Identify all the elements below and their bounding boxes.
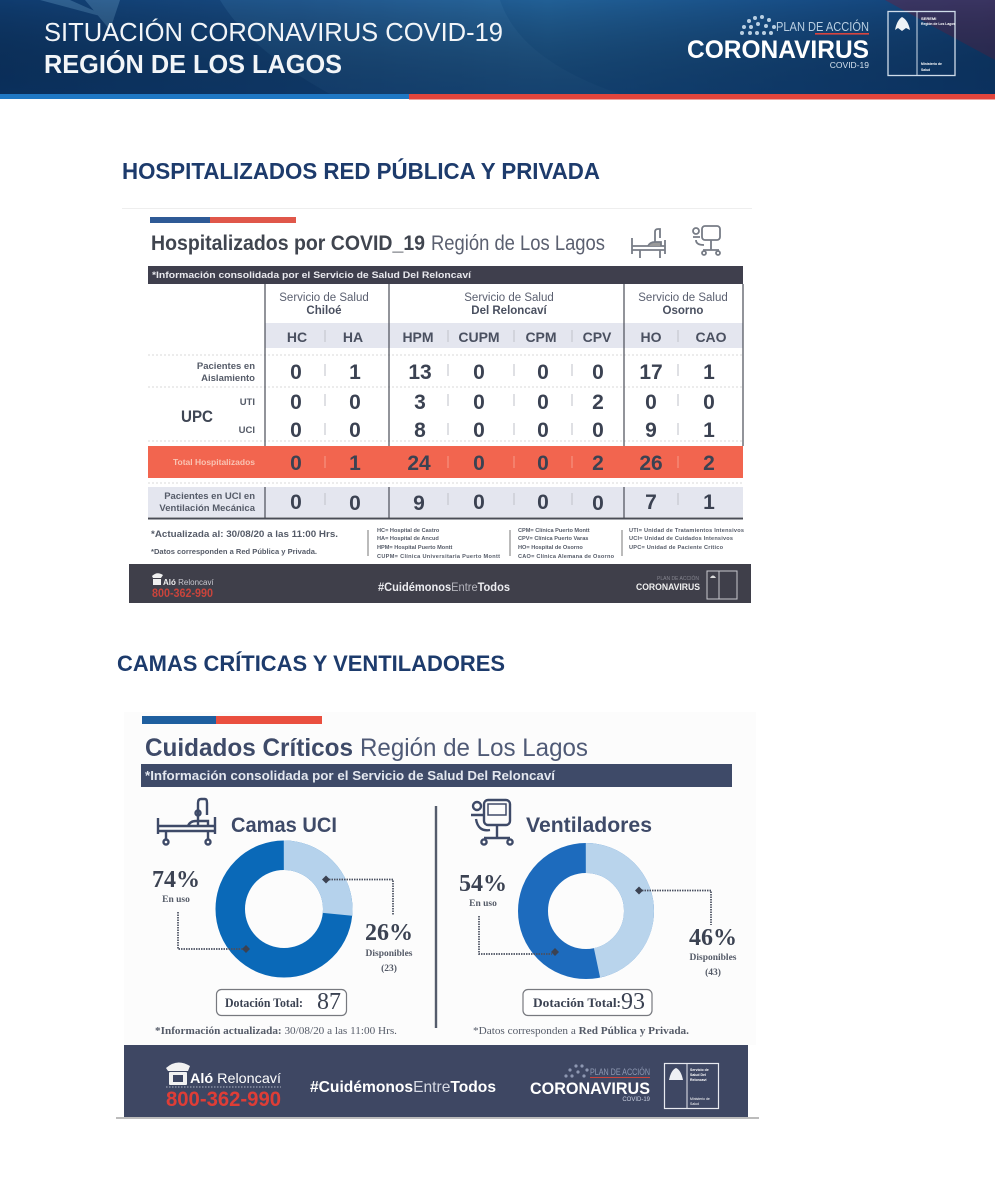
row: pacientes en aislamiento: 17 — [639, 361, 663, 384]
callout: en uso 54% — [459, 871, 559, 956]
row: total hospitalizados: 1 — [349, 452, 361, 475]
row: uci: 0 — [537, 419, 549, 442]
label: ventiladores: Ventiladores — [526, 814, 652, 837]
section: ventiladores — [459, 800, 737, 1037]
dotación total box: Dotación Total: — [533, 996, 621, 1010]
header logo: seremi de salud: SEREMI — [921, 16, 936, 21]
row: total hospitalizados: 26 — [639, 452, 663, 475]
callout: en uso 74% — [152, 867, 250, 953]
row: uci: 9 — [645, 419, 657, 442]
total row highlight — [148, 446, 743, 478]
table column codes: HO — [640, 329, 662, 345]
row: total hospitalizados: 0 — [537, 452, 549, 475]
row labels — [159, 361, 256, 514]
ventilation row highlight — [148, 487, 743, 517]
callout: en uso 54%: 54% — [459, 871, 507, 897]
row labels: UPC — [181, 407, 213, 426]
callout: disponibles 46%: Disponibles — [690, 953, 737, 963]
icon: bed — [158, 799, 215, 844]
row: pacientes en aislamiento — [290, 361, 715, 384]
row: total hospitalizados: 2 — [703, 452, 715, 475]
callout: en uso 74%: En uso — [162, 895, 190, 905]
row labels: Aislamiento — [201, 373, 255, 384]
heading: camas críticas: CAMAS CRÍTICAS Y VENTILADORES — [117, 651, 505, 676]
abbreviation legend: HO= Hospital de Osorno — [518, 545, 583, 551]
icon: hospital bed — [632, 229, 665, 258]
table column group headers: Del Reloncaví — [471, 305, 548, 317]
table column group headers: Osorno — [663, 305, 703, 317]
row: ventilación mecánica — [290, 491, 715, 515]
row: total hospitalizados — [290, 452, 715, 475]
header banner — [0, 0, 995, 100]
row labels: Total Hospitalizados — [173, 457, 255, 467]
row: uti: 0 — [290, 391, 302, 414]
header logo: plan de acción coronavirus — [687, 15, 869, 70]
header logo: seremi de salud — [888, 12, 955, 76]
row: total hospitalizados: 0 — [473, 452, 485, 475]
table column codes — [265, 323, 743, 348]
note: datos corresponden: *Datos corresponden a Red Pública y Privada. — [473, 1026, 689, 1037]
table column codes: CAO — [695, 329, 727, 345]
row: pacientes en aislamiento: 0 — [537, 361, 549, 384]
panel footer: Aló Reloncaví — [163, 578, 214, 587]
panel title — [145, 734, 588, 762]
callout: en uso 54%: En uso — [469, 899, 497, 909]
callout: disponibles 46%: 46% — [689, 925, 737, 951]
row labels: UCI — [239, 425, 255, 436]
callout: disponibles 26%: 26% — [365, 920, 413, 946]
row: total hospitalizados: 2 — [592, 452, 604, 475]
row: ventilación mecánica: 7 — [645, 491, 657, 514]
row: pacientes en aislamiento: 1 — [349, 361, 361, 384]
abbreviation legend: UPC= Unidad de Paciente Crítico — [629, 545, 724, 551]
row: ventilación mecánica: 0 — [290, 491, 302, 514]
header title: REGIÓN DE LOS LAGOS — [44, 49, 342, 79]
header title — [44, 17, 503, 79]
logo: ministerio: Ministerio de — [690, 1097, 710, 1101]
label: camas uci: Camas UCI — [231, 814, 337, 837]
panel footer: PLAN DE ACCIÓN — [657, 575, 699, 582]
callout: disponibles 46% — [635, 886, 737, 978]
logo: plan de acción coronavirus: PLAN DE ACCIÓN — [590, 1067, 650, 1077]
row: uci: 0 — [349, 419, 361, 442]
row: pacientes en aislamiento: 13 — [408, 361, 432, 384]
callout: disponibles 26%: Disponibles — [366, 949, 413, 959]
row: ventilación mecánica: 0 — [592, 492, 604, 515]
panel: hospitalizados table — [122, 208, 752, 603]
row: pacientes en aislamiento: 0 — [473, 361, 485, 384]
row: uti: 0 — [703, 391, 715, 414]
accent stripes — [150, 217, 296, 223]
row: uci: 1 — [703, 419, 715, 442]
table column group headers: Servicio de Salud — [279, 292, 369, 304]
table column codes: CPV — [583, 329, 612, 345]
abbreviation legend: HC= Hospital de Castro — [377, 528, 440, 534]
row: uti: 0 — [645, 391, 657, 414]
row labels: Ventilación Mecánica — [159, 503, 256, 514]
table column codes: HPM — [402, 329, 434, 345]
table column codes: HA — [343, 329, 363, 345]
info bar: *Información consolidada por el Servicio de Salud Del Reloncaví — [152, 270, 471, 281]
info bar: *Información consolidada por el Servicio de Salud Del Reloncaví — [145, 768, 555, 783]
panel footer: CORONAVIRUS — [636, 582, 700, 593]
abbreviation legend: HA= Hospital de Ancud — [377, 536, 439, 542]
callout: disponibles 26% — [322, 876, 413, 974]
abbreviation legend: UTI= Unidad de Tratamientos Intensivos — [629, 528, 744, 534]
abbreviation legend: HPM= Hospital Puerto Montt — [377, 545, 452, 551]
update notes: *Datos corresponden a Red Pública y Privada. — [151, 547, 317, 556]
row: ventilación mecánica: 0 — [473, 491, 485, 514]
header logo: plan de acción coronavirus: PLAN DE ACCIÓN — [776, 19, 869, 34]
update notes: *Actualizada al: 30/08/20 a las 11:00 Hrs. — [151, 529, 338, 540]
accent stripes — [142, 716, 322, 724]
panel footer: #CuidémonosEntreTodos — [378, 580, 510, 594]
callout: en uso 74%: 74% — [152, 867, 200, 893]
logo: ministerio: Salud — [690, 1102, 699, 1106]
info bar — [141, 764, 732, 787]
header title: SITUACIÓN CORONAVIRUS COVID-19 — [44, 17, 503, 47]
panel title — [151, 232, 605, 255]
row: uci: 0 — [290, 419, 302, 442]
update notes — [151, 529, 338, 556]
logo: plan de acción coronavirus: CORONAVIRUS — [530, 1079, 650, 1098]
logo: plan de acción coronavirus: COVID-19 — [622, 1097, 651, 1103]
row: total hospitalizados: 24 — [407, 452, 431, 475]
panel title: Hospitalizados por COVID_19 — [151, 232, 425, 255]
row: ventilación mecánica: 0 — [349, 492, 361, 515]
table column group headers — [279, 292, 728, 317]
row: pacientes en aislamiento: 0 — [592, 361, 604, 384]
table column codes: CPM — [525, 329, 557, 345]
table column codes: HC — [287, 329, 307, 345]
row: uti: 2 — [592, 391, 604, 414]
row: uti: 3 — [414, 391, 426, 414]
dotación total box: 87 — [317, 989, 341, 1015]
dotación total box: Dotación Total: — [225, 996, 303, 1010]
row labels: UTI — [240, 397, 255, 408]
row labels: Pacientes en UCI en — [164, 491, 255, 502]
abbreviation legend: CPV= Clínica Puerto Varas — [518, 536, 588, 542]
row: pacientes en aislamiento: 1 — [703, 361, 715, 384]
dotación total box — [216, 989, 346, 1016]
row: uti: 0 — [473, 391, 485, 414]
row: uti: 0 — [349, 391, 361, 414]
logo: ministerio: Servicio de — [690, 1068, 709, 1072]
donut chart: camas uci — [230, 855, 338, 963]
row labels: Pacientes en — [197, 361, 255, 372]
row: ventilación mecánica: 9 — [413, 492, 425, 515]
table column group headers: Servicio de Salud — [638, 292, 728, 304]
aló reloncaví phone line — [166, 1070, 281, 1111]
table column codes: CUPM — [458, 329, 500, 345]
panel footer — [116, 1045, 759, 1119]
abbreviation legend: UCI= Unidad de Cuidados Intensivos — [629, 536, 733, 542]
table frame lines — [148, 284, 743, 518]
header logo: seremi de salud: Salud — [921, 68, 930, 72]
header logo: plan de acción coronavirus: COVID-19 — [830, 60, 869, 70]
header logo: plan de acción coronavirus: CORONAVIRUS — [687, 36, 869, 64]
logo: plan de acción coronavirus — [530, 1064, 651, 1103]
callout: disponibles 26%: (23) — [381, 963, 397, 974]
donut chart: ventiladores — [533, 858, 639, 964]
row: uti — [290, 391, 715, 414]
row: pacientes en aislamiento: 0 — [290, 361, 302, 384]
abbreviation legend: CPM= Clínica Puerto Montt — [518, 528, 590, 534]
logo: ministerio: Reloncaví — [690, 1078, 708, 1082]
aló reloncaví phone line: 800-362-990 — [166, 1088, 281, 1111]
abbreviation legend: CUPM= Clínica Universitaria Puerto Montt — [377, 554, 500, 560]
row: total hospitalizados: 0 — [290, 452, 302, 475]
icon: ventilator — [471, 800, 513, 845]
logo: ministerio — [664, 1064, 718, 1108]
abbreviation legend — [368, 528, 744, 560]
row: ventilación mecánica: 1 — [703, 491, 715, 514]
row: uci: 0 — [473, 419, 485, 442]
row: uci: 0 — [592, 419, 604, 442]
table column group headers: Chiloé — [306, 305, 342, 317]
aló reloncaví phone line: Aló Reloncaví — [190, 1070, 281, 1086]
abbreviation legend: CAO= Clínica Alemana de Osorno — [518, 554, 615, 560]
table column group headers: Servicio de Salud — [464, 292, 554, 304]
row: ventilación mecánica: 0 — [537, 491, 549, 514]
panel title: Cuidados Críticos — [145, 734, 353, 762]
info bar — [148, 266, 743, 284]
row: uti: 0 — [537, 391, 549, 414]
note: información actualizada: *Información actualizada: 30/08/20 a las 11:00 Hrs. — [155, 1026, 397, 1037]
panel title: Región de Los Lagos — [431, 232, 605, 255]
panel title: Región de Los Lagos — [360, 734, 588, 762]
dotación total box: 93 — [621, 989, 645, 1015]
panel footer — [129, 564, 751, 603]
dotación total box — [523, 989, 652, 1016]
row: uci — [290, 419, 715, 442]
logo: ministerio: Salud Del — [690, 1073, 706, 1077]
callout: disponibles 46%: (43) — [705, 967, 721, 978]
icon: ventilator — [693, 226, 720, 255]
header logo: seremi de salud: Región de Los Lagos — [921, 22, 955, 26]
icon: telephone — [166, 1062, 190, 1085]
panel: cuidados críticos — [116, 712, 759, 1119]
hashtag: #CuidémonosEntreTodos — [310, 1079, 496, 1096]
panel footer: 800-362-990 — [152, 586, 213, 600]
section: camas uci — [152, 799, 413, 1037]
heading: hospitalizados: HOSPITALIZADOS RED PÚBLICA Y PRIVADA — [122, 157, 600, 184]
row: uci: 8 — [414, 419, 426, 442]
header logo: seremi de salud: Ministerio de — [921, 62, 942, 66]
